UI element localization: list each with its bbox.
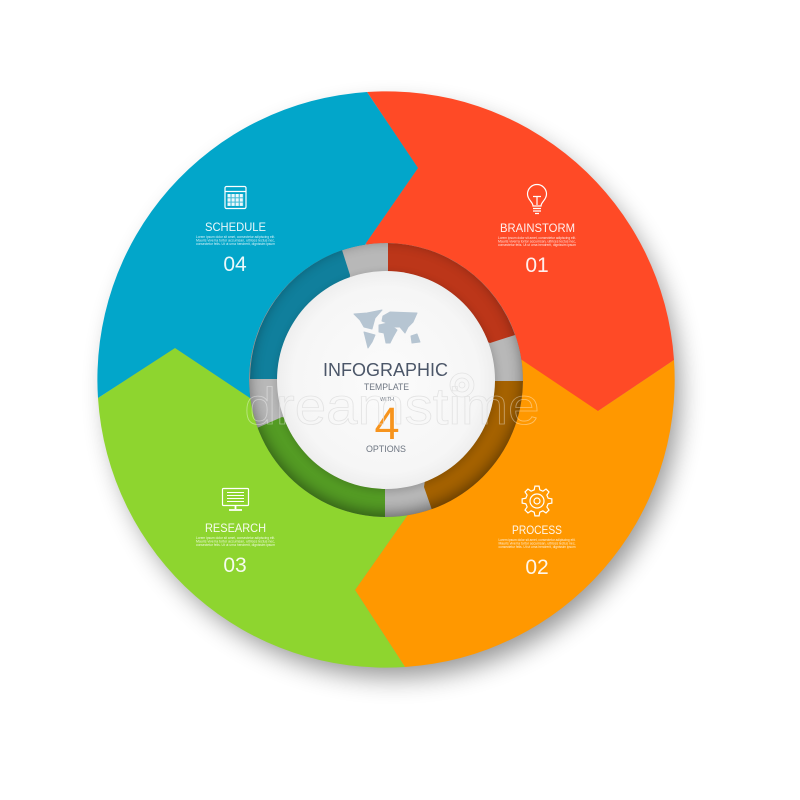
label: brainstorm: BRAINSTORM (500, 221, 575, 235)
segment 04: blue arrow (97, 92, 418, 398)
description: process: Mauris viverra tortor accumsan, ultrices lectus nec, (498, 542, 576, 546)
label: process: PROCESS (512, 523, 562, 537)
ring section: dark blue (250, 250, 350, 379)
icon: monitor (222, 488, 248, 510)
description: process (498, 538, 576, 549)
panel: research (196, 488, 275, 577)
panel: brainstorm (498, 184, 576, 277)
segment 02: orange arrow (355, 360, 675, 667)
ring section: dark green (257, 417, 385, 517)
ring section: dark red (388, 243, 515, 343)
description: brainstorm (498, 236, 576, 247)
description: process: Lorem ipsum dolor sit amet, consectetur adipiscing elit. (498, 538, 576, 542)
number: 01: 01 (525, 254, 549, 277)
panel: schedule (196, 186, 275, 276)
segment 03: green arrow (98, 348, 407, 668)
description: research: Mauris viverra tortor accumsan, ultrices lectus nec, (196, 540, 275, 544)
segment 01: red arrow (366, 91, 674, 440)
icon: calendar (225, 186, 246, 208)
description: brainstorm: Lorem ipsum dolor sit amet, consectetur adipiscing elit. (498, 236, 576, 240)
description: schedule (196, 235, 275, 246)
small text: options: OPTIONS (366, 444, 406, 454)
ring inner shadow (249, 243, 523, 517)
watermark (246, 372, 538, 425)
icon: light bulb (528, 184, 546, 214)
description: schedule: consectetur felis. Ut ut urna hendrerit, dignissim ipsum (196, 242, 275, 246)
number: 03: 03 (223, 554, 247, 577)
description: process: consectetur felis. Ut ut urna hendrerit, dignissim ipsum (498, 545, 576, 549)
number: 02: 02 (525, 556, 549, 579)
centre ring recess (249, 243, 523, 517)
number: 04: 04 (223, 253, 247, 276)
panel: process (498, 486, 576, 579)
description: research: consectetur felis. Ut ut urna hendrerit, dignissim ipsum (196, 543, 275, 547)
description: research (196, 536, 275, 547)
subheading: template: TEMPLATE (364, 382, 409, 392)
watermark: dreamstime (244, 378, 540, 436)
description: research: Lorem ipsum dolor sit amet, consectetur adipiscing elit. (196, 536, 275, 540)
disc cast shadow (277, 272, 497, 492)
big number 4: 4 (374, 398, 400, 449)
label: research: RESEARCH (205, 521, 266, 535)
heading: infographic: INFOGRAPHIC (323, 359, 448, 380)
description: brainstorm: Mauris viverra tortor accumsan, ultrices lectus nec, (498, 240, 576, 244)
description: schedule: Lorem ipsum dolor sit amet, consectetur adipiscing elit. (196, 235, 275, 239)
label: schedule: SCHEDULE (205, 220, 266, 234)
ring section: dark orange (424, 381, 523, 510)
icon: world map (354, 310, 420, 348)
watermark: dreamstime (244, 378, 540, 436)
centre title text (323, 359, 448, 454)
description: brainstorm: consectetur felis. Ut ut urna hendrerit, dignissim ipsum (498, 243, 576, 247)
small text: with: WITH (380, 397, 394, 403)
outer drop shadow (109, 107, 679, 677)
donut chart segments (97, 91, 675, 668)
icon: gear (522, 486, 552, 516)
description: schedule: Mauris viverra tortor accumsan, ultrices lectus nec, (196, 238, 275, 242)
centre disc (277, 271, 495, 489)
